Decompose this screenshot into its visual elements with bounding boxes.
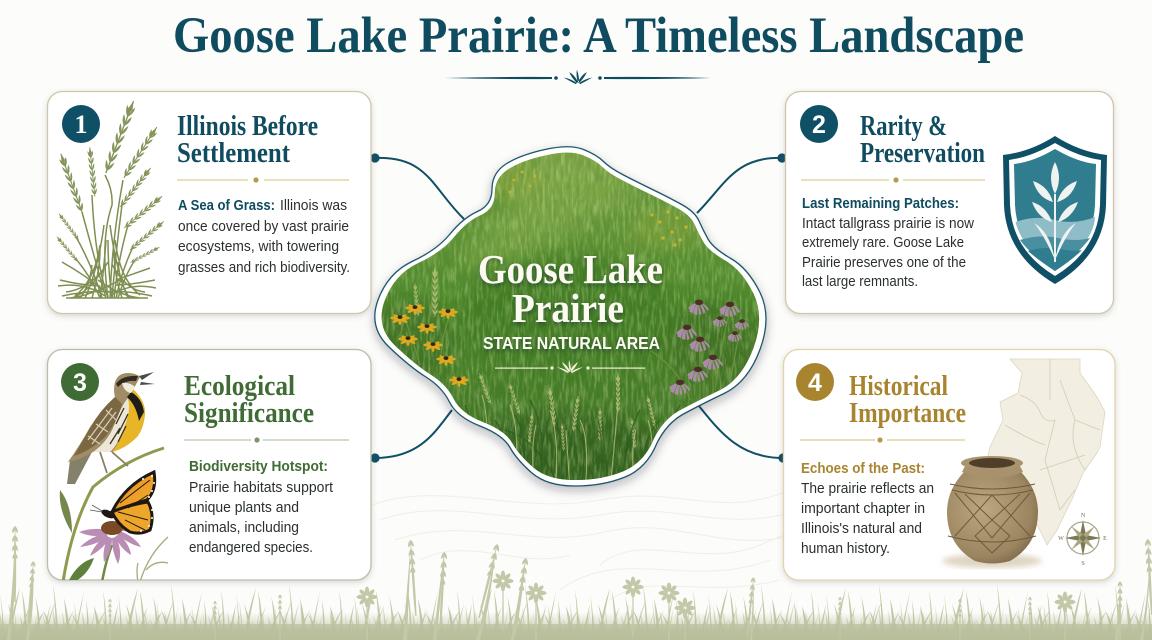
- icon: compass rose: W: [1058, 536, 1064, 542]
- body text: A Sea of Grass:: [178, 198, 275, 214]
- body text: Intact tallgrass prairie is now: [802, 216, 974, 232]
- body text: Last Remaining Patches:: [802, 196, 959, 212]
- body text: last large remnants.: [802, 274, 918, 290]
- heading: [184, 371, 314, 429]
- heading: [849, 371, 966, 429]
- body text: Biodiversity Hotspot:: [189, 459, 328, 475]
- body text: The prairie reflects an: [801, 481, 934, 497]
- icon: compass rose: S: [1081, 561, 1085, 567]
- small yellow wildflowers: [509, 171, 688, 247]
- heading: Rarity &: [860, 111, 947, 142]
- body text: ecosystems, with towering: [178, 239, 339, 255]
- number badge 3: 3: [73, 369, 87, 397]
- heading: [177, 111, 318, 169]
- black-eyed susans: [390, 304, 469, 387]
- body text: extremely rare. Goose Lake: [802, 235, 964, 251]
- body text: human history.: [801, 541, 890, 557]
- body text: important chapter in: [801, 501, 925, 517]
- icon: compass rose: E: [1103, 536, 1107, 542]
- icon: prairie grass tuft: [55, 100, 165, 298]
- body text: Echoes of the Past:: [801, 461, 925, 477]
- badge title: Prairie: [512, 285, 624, 331]
- body text: [178, 198, 350, 276]
- number badge 2: 2: [812, 111, 826, 139]
- panel 4: Historical Importance: [784, 350, 1115, 580]
- icon: branch and leaves: [60, 448, 168, 582]
- center badge: prairie scene: [360, 140, 780, 505]
- body text: [801, 461, 934, 557]
- purple coneflowers: [669, 300, 749, 395]
- icon: Illinois map: [985, 359, 1105, 545]
- heading: Significance: [184, 398, 314, 429]
- panel 2: Rarity & Preservation: [786, 92, 1114, 314]
- connector lines: [375, 158, 783, 458]
- divider: [801, 177, 985, 183]
- body text: [189, 459, 333, 556]
- meadow grass border: [0, 526, 1152, 640]
- heading: Illinois Before: [177, 111, 318, 142]
- icon: compass rose: [1058, 513, 1107, 567]
- number badge 1: [62, 105, 100, 143]
- icon: shield with grass: [1003, 136, 1107, 284]
- body text: animals, including: [189, 520, 299, 536]
- number badge 4: 4: [808, 369, 822, 397]
- badge subtitle: STATE NATURAL AREA: [483, 333, 660, 353]
- background topographic lines: [372, 490, 810, 600]
- icon: compass rose: N: [1081, 513, 1086, 519]
- icon: coneflower: [79, 521, 141, 564]
- panel 1: Illinois Before Settlement: [48, 92, 371, 314]
- divider: [177, 177, 349, 183]
- heading: Importance: [849, 398, 966, 429]
- icon: meadowlark: [67, 372, 155, 484]
- body text: endangered species.: [189, 540, 313, 556]
- title: Goose Lake Prairie: A Timeless Landscape: [173, 8, 1024, 64]
- body text: unique plants and: [189, 500, 299, 516]
- divider: [800, 437, 965, 443]
- icon: monarch butterfly: [90, 472, 155, 533]
- body text: Prairie habitats support: [189, 480, 333, 496]
- body text: grasses and rich biodiversity.: [178, 260, 350, 276]
- heading: [860, 111, 985, 169]
- icon: clay pot: [942, 456, 1042, 568]
- connector dots: [370, 153, 788, 463]
- panel 3: Ecological Significance: [48, 350, 371, 582]
- badge ornament: [495, 360, 645, 373]
- number badge 4: [796, 363, 834, 401]
- heading: Historical: [849, 371, 948, 402]
- body text: once covered by vast prairie: [178, 219, 349, 235]
- badge title: Goose Lake: [478, 246, 663, 292]
- title ornament: [445, 70, 711, 84]
- number badge 1: 1: [74, 110, 88, 139]
- heading: Ecological: [184, 371, 295, 402]
- body text: Prairie preserves one of the: [802, 255, 966, 271]
- badge title: [478, 246, 663, 331]
- number badge 3: [61, 363, 99, 401]
- heading: Settlement: [177, 138, 291, 169]
- number badge 2: [800, 105, 838, 143]
- body text: [802, 196, 974, 290]
- body text: Illinois's natural and: [801, 521, 922, 537]
- tall grass at bottom of the badge: [413, 267, 657, 451]
- body text: Illinois was: [280, 198, 347, 214]
- heading: Preservation: [860, 138, 985, 169]
- divider: [184, 437, 349, 443]
